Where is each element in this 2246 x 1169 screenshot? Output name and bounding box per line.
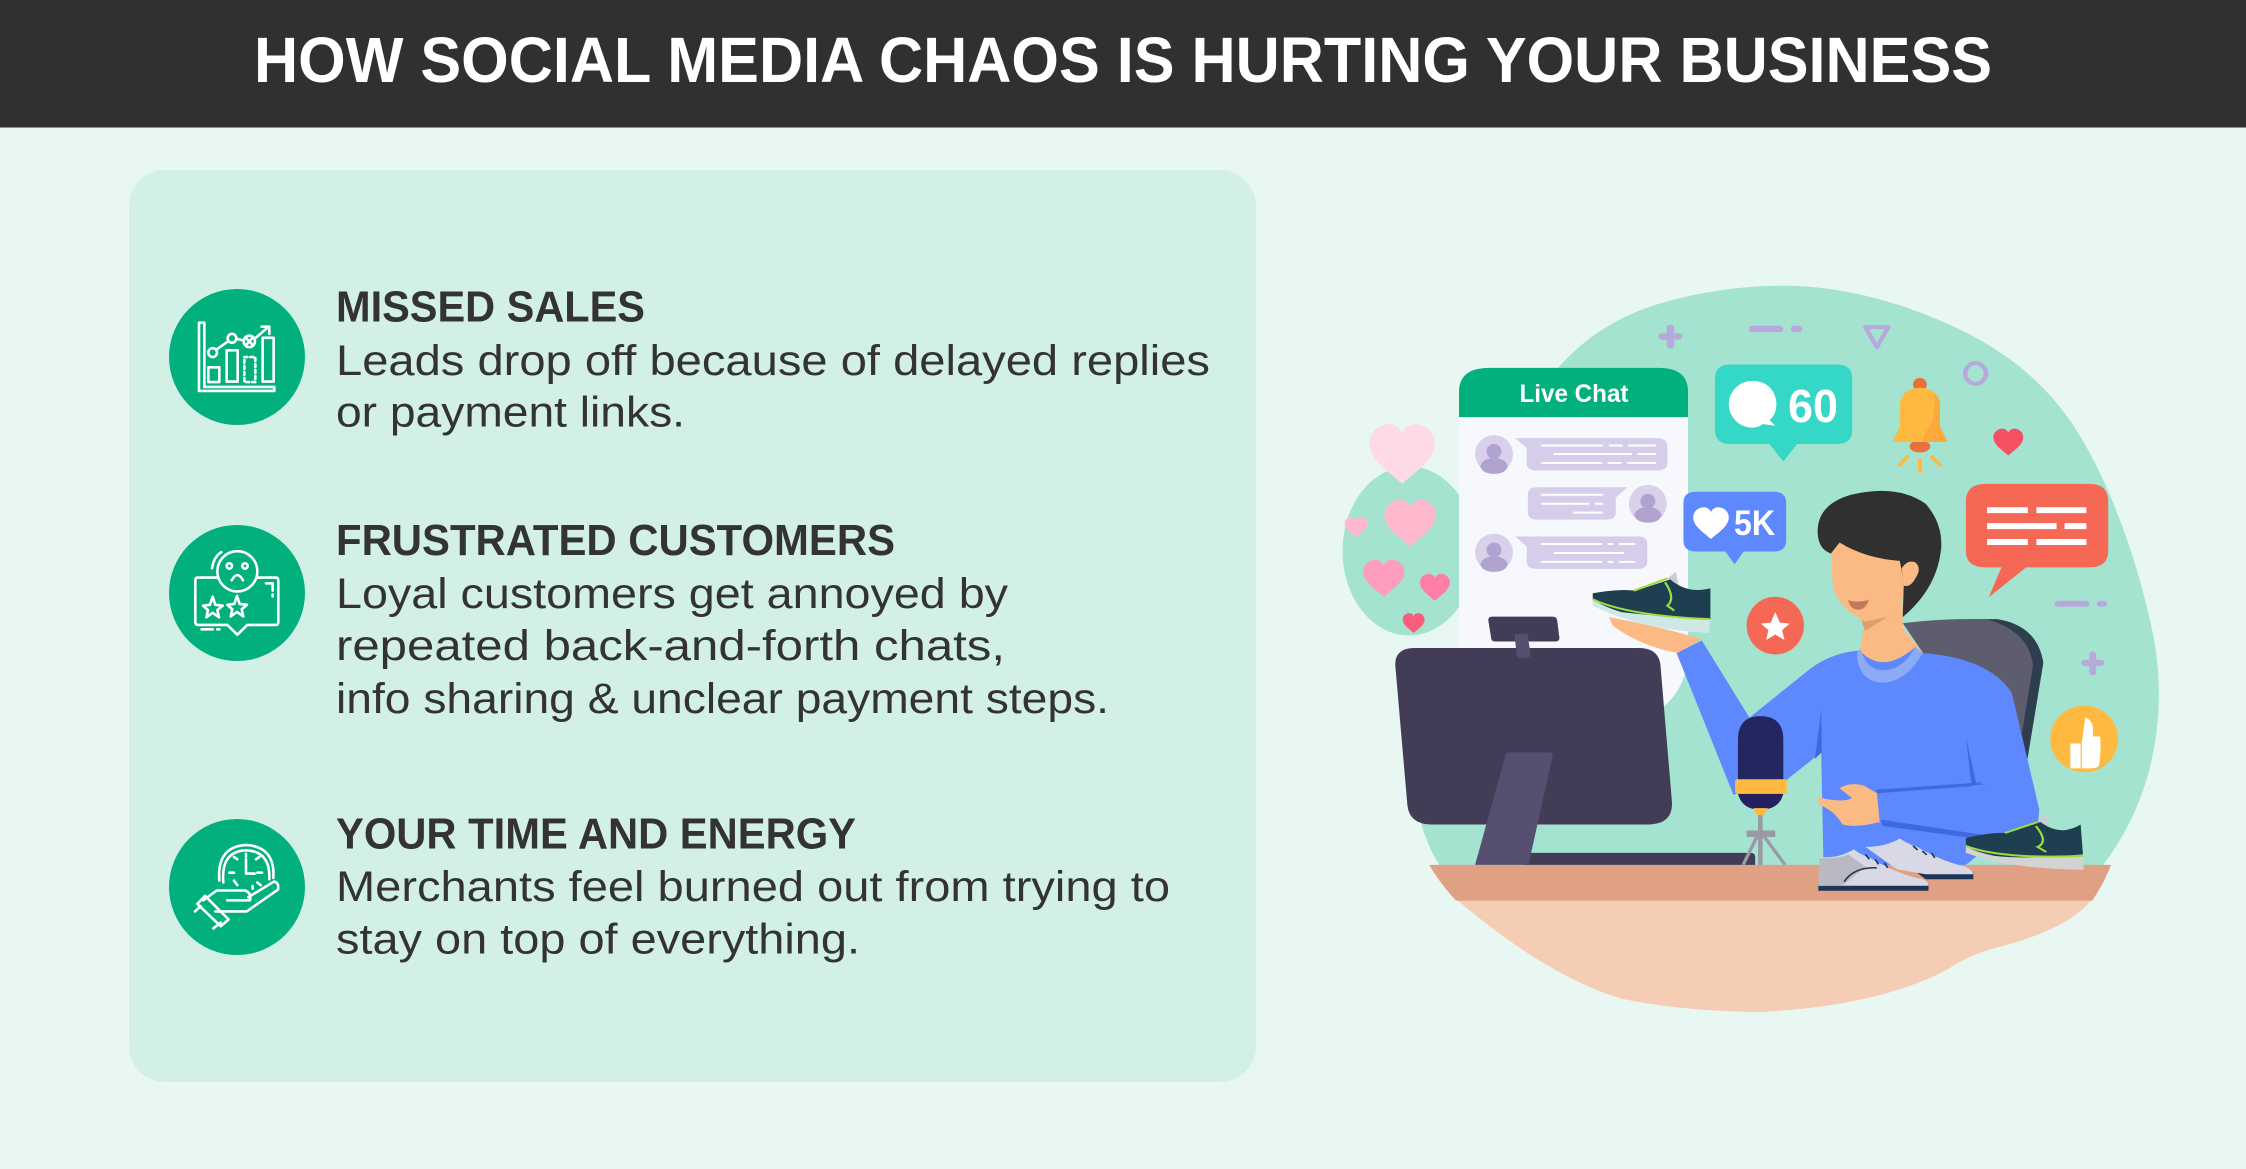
icon: clock in hand	[169, 819, 305, 955]
heading: time and energy: YOUR TIME AND ENERGY	[336, 810, 856, 858]
item: frustrated customers	[169, 516, 1109, 723]
chat row 2	[1528, 485, 1667, 523]
chat row 1	[1475, 435, 1667, 474]
background blob	[1418, 286, 2159, 872]
shoe on desk	[1966, 813, 2084, 870]
description: missed sales	[336, 337, 1210, 436]
ear	[1902, 562, 1919, 586]
face	[1831, 541, 1904, 622]
number: 60 comments: 60	[1788, 380, 1838, 432]
monitor	[1395, 617, 1755, 865]
item: missed sales	[169, 282, 1210, 436]
collar	[1857, 647, 1923, 683]
hand with shoe	[1609, 617, 1702, 653]
live chat window	[1459, 368, 1688, 708]
description: time and energy: Merchants feel burned out from trying to	[336, 863, 1170, 911]
hair	[1818, 491, 1941, 617]
title: HOW SOCIAL MEDIA CHAOS IS HURTING YOUR BUSINESS	[254, 24, 1992, 96]
shoe held in hand	[1593, 572, 1710, 633]
description: missed sales: or payment links.	[336, 388, 685, 436]
microphone	[1735, 716, 1787, 865]
icon: sales chart	[169, 289, 305, 425]
like bubble	[1683, 492, 1786, 564]
description: frustrated customers: repeated back-and-forth chats,	[336, 622, 1005, 670]
desk front	[1456, 899, 2092, 1012]
icon: bell	[1892, 378, 1947, 471]
illustration: seller live selling shoes	[1342, 286, 2159, 1012]
description: frustrated customers	[336, 570, 1109, 723]
icon: unhappy rating	[169, 525, 305, 661]
speech bubble: red	[1966, 484, 2108, 597]
item: time and energy	[169, 810, 1170, 964]
sneaker: back	[1865, 838, 1973, 879]
mouth	[1848, 600, 1869, 610]
description: frustrated customers: info sharing & unclear payment steps.	[336, 675, 1109, 723]
panel: business impacts	[129, 170, 1256, 1082]
small heart blob	[1342, 466, 1476, 636]
comment bubble	[1715, 364, 1852, 461]
person	[1609, 491, 2039, 865]
desk top	[1429, 865, 2111, 901]
hearts	[1345, 424, 1450, 633]
neck	[1860, 603, 1923, 675]
heading: frustrated customers: FRUSTRATED CUSTOMERS	[336, 516, 895, 565]
description: missed sales: Leads drop off because of delayed replies	[336, 337, 1210, 385]
description: time and energy: stay on top of everything.	[336, 916, 860, 964]
sneaker: front	[1818, 849, 1929, 891]
purple decorations	[1659, 325, 2107, 675]
heart: red	[1993, 429, 2023, 455]
label: live chat: Live Chat	[1520, 380, 1629, 408]
icon: star badge	[1747, 597, 1804, 654]
chat row 3	[1475, 534, 1647, 572]
description: time and energy	[336, 863, 1170, 964]
heading: missed sales: MISSED SALES	[336, 282, 645, 332]
header bar	[0, 0, 2246, 128]
icon: thumbs up badge	[2050, 706, 2118, 772]
number: 5K likes: 5K	[1734, 504, 1775, 543]
chair	[1903, 619, 2043, 767]
lower hand	[1818, 784, 1880, 826]
description: frustrated customers: Loyal customers get annoyed by	[336, 570, 1009, 618]
sweater	[1677, 641, 2039, 865]
sweater folds	[1815, 710, 1997, 841]
